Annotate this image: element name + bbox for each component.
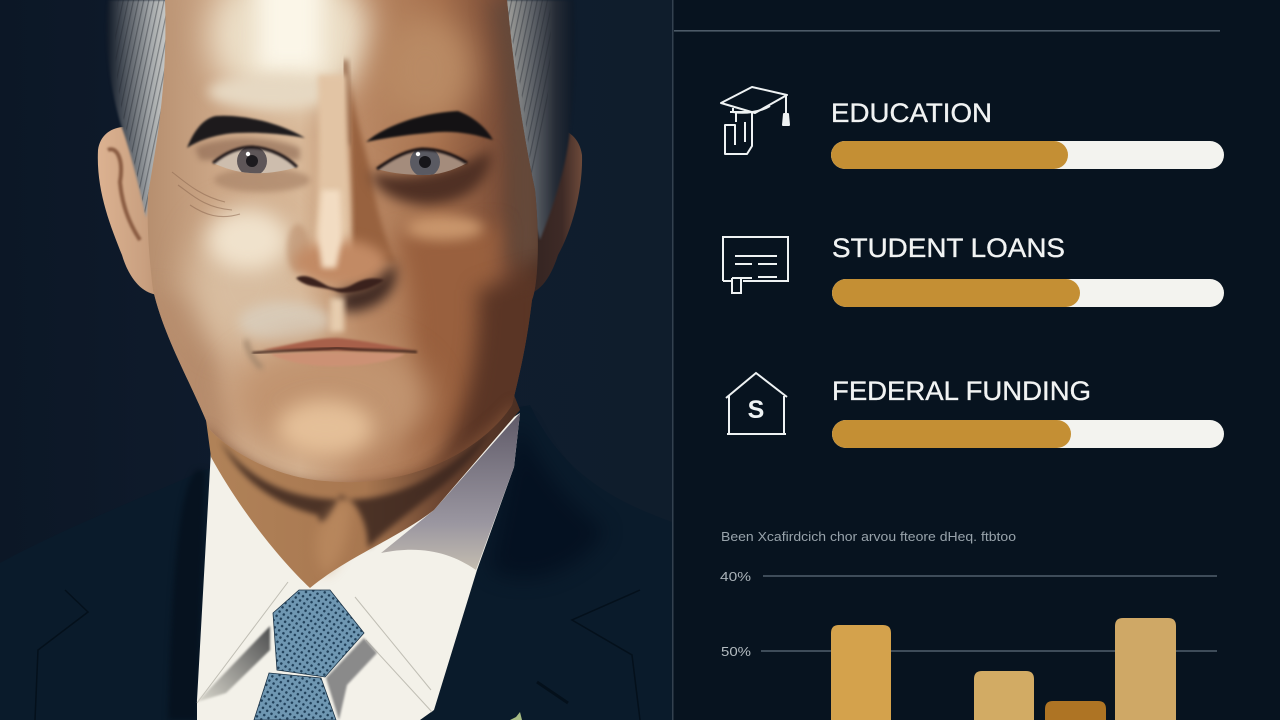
crease between brows [345,60,350,145]
tie [254,590,364,720]
face [140,0,550,500]
under nose shadow [339,262,396,312]
right eye glint [416,152,420,156]
nose bridge light [312,75,351,255]
right eye socket [370,150,491,205]
dollar sign: S [748,396,764,424]
right hair [500,0,575,240]
left cheek light [208,210,288,270]
top horizontal divider [674,30,1220,32]
left eye white [213,147,297,173]
bar 4 [1115,618,1176,720]
jacket lapel lines [35,590,640,720]
lapel pin [510,712,522,720]
progress track: federal funding [832,420,1224,448]
lower lip [270,352,405,366]
background right panel [672,0,1280,720]
left ear [98,127,175,295]
tie knot [273,590,364,677]
icon: graduation cap [721,87,789,154]
progress track: education [831,141,1224,169]
left eye glint [246,152,250,156]
forehead glow [210,0,370,105]
chart title: Been Xcafirdcich chor arvou fteore dHeq. ftbtoo [721,529,1016,544]
mouth corner shade [246,340,262,368]
right hair strands [505,0,551,190]
tie blade [254,673,336,720]
progress fill: education [831,141,1068,169]
background left [0,0,672,720]
chin lower shadow [208,405,512,482]
right hair mass [500,0,575,240]
left iris [237,147,267,174]
progress track: student loans [832,279,1224,307]
lower face base [230,340,430,460]
left eye [213,146,297,176]
neck [206,360,520,588]
gridline 40% [763,575,1217,577]
shirt [197,413,520,720]
wrinkles [172,172,240,217]
axis label: 50%: 50% [721,644,751,659]
house outline [726,373,787,434]
portrait of man in suit [0,0,672,720]
neck shadow under chin [220,430,490,548]
right eye [377,147,467,177]
vertical panel divider [672,0,674,720]
axis label: 40%: 40% [720,569,752,584]
skin base [140,0,550,490]
left hair [106,0,172,218]
shadow under left collar [197,626,270,702]
philtrum [330,298,344,332]
bar 2 [974,671,1034,720]
brow shadow left [195,138,300,160]
nose bridge dark right [350,70,396,262]
left eyebrow [187,116,305,148]
gridline 50% [761,650,1217,652]
label: education: EDUCATION [831,98,992,128]
progress fill: federal funding [832,420,1071,448]
collar shadow right [381,413,520,570]
label: student loans: STUDENT LOANS [832,233,1065,263]
nose side shade [287,224,309,272]
nose tip [294,240,386,284]
right cheek glow [407,216,483,240]
left lash [213,147,297,167]
icon: certificate [723,237,788,293]
right iris [410,147,440,177]
right forehead warm [377,15,473,125]
label: federal funding: FEDERAL FUNDING [832,376,1091,406]
bar 1 [831,625,891,720]
right eyebrow [366,111,493,142]
right eye white [377,149,467,175]
neck centre light [316,500,352,575]
right ear [515,126,582,295]
upper lip [262,338,415,351]
bar chart [720,529,1217,720]
progress fill: student loans [832,279,1080,307]
left eye socket [214,168,310,192]
right cheek warm [395,225,500,450]
chin light [277,400,373,456]
jacket [0,405,672,720]
right jaw dark [424,274,535,468]
jacket shading near shirt [168,470,205,720]
row: student loans [723,233,1224,307]
row: education [721,87,1224,169]
icon: house with dollar [726,373,787,434]
forehead highlight [258,0,322,70]
nose highlight [318,190,342,268]
nostrils [296,276,384,293]
right shoulder shadow [490,420,605,578]
left jaw warm [154,294,234,440]
left hair strands [115,0,170,218]
right temple dark [490,0,545,260]
bar 3 [1045,701,1106,720]
left hair mass [106,0,172,218]
left ear inner [108,149,140,240]
moustache area [239,302,331,342]
collar lines [197,582,432,712]
right lash [377,149,467,169]
shadow right of tie [326,638,377,720]
mouth line [252,348,417,353]
left cheek base [190,210,300,350]
row: federal funding [726,373,1224,448]
brow ridge light [208,76,332,108]
